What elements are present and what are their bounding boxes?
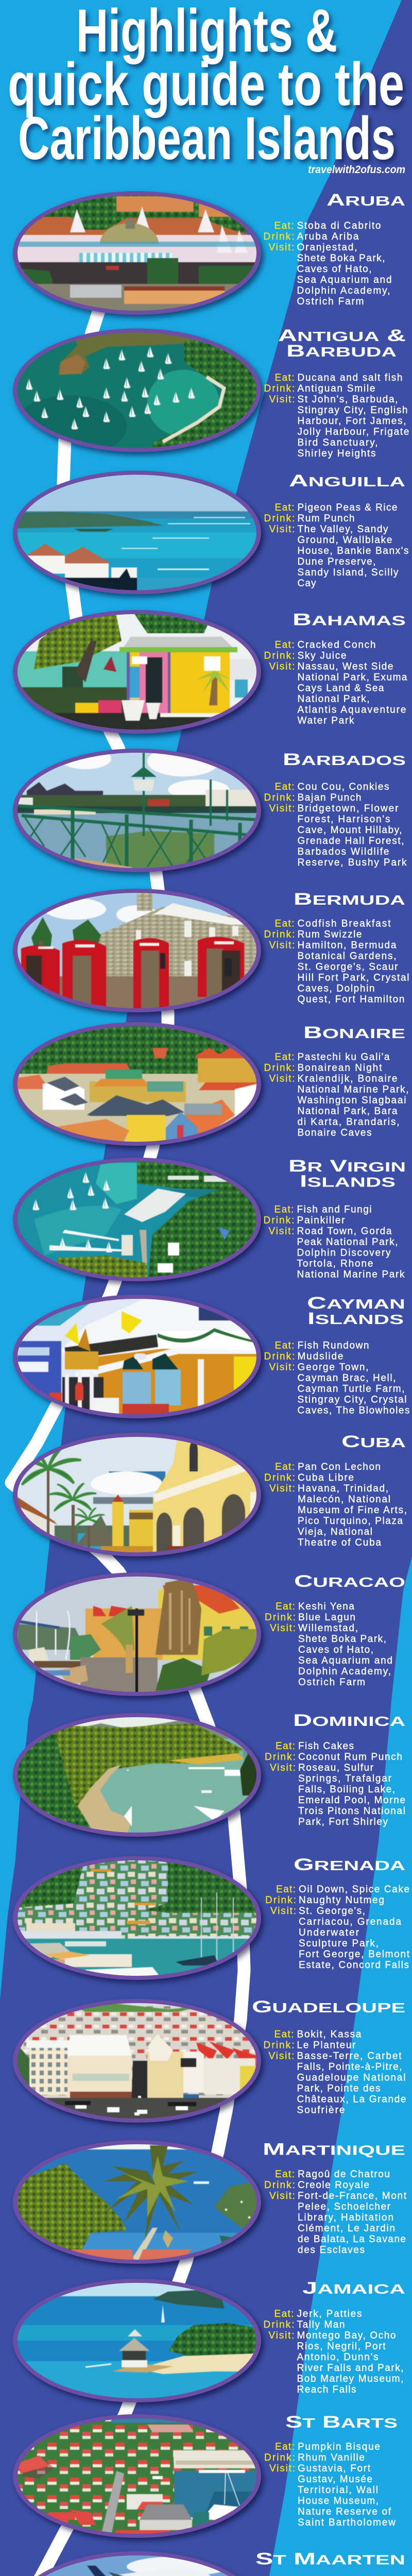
text block: Bermuda: Visit: (269, 940, 295, 951)
text block: Aruba: Oranjestad, (297, 242, 357, 253)
text block: Antigua & Barbuda: Stingray City, English (298, 405, 408, 416)
text block: Martinique: Drink: (264, 2180, 295, 2191)
text block: Cuba: Pan Con Lechon (298, 1462, 381, 1472)
text block: Aruba (264, 221, 391, 307)
photo: St Maarten plane over beach (13, 2551, 261, 2576)
text block: Antigua & Barbuda: Eat: (275, 372, 295, 383)
text block: Grenada: Drink: (265, 1895, 296, 1906)
photo: Dominica green bay (13, 1713, 261, 1837)
text block: Cayman Islands: Cayman Brac, Hell, (298, 1372, 396, 1384)
heading: British Virgin Islands: B R V IRGIN (288, 1157, 406, 1175)
text block: Guadeloupe: Guadeloupe National (297, 2072, 406, 2083)
text block: Dominica: Coconut Rum Punch (298, 1752, 402, 1762)
text block: Martinique: de Balata, La Savane (298, 2234, 406, 2245)
text block: Curacao: Caves of Hato, (298, 1645, 373, 1655)
text block: Barbados: Drink: (264, 792, 295, 803)
text block: Grenada: Naughty Nutmeg (299, 1895, 384, 1906)
text block: Bonaire: National Park, Bara (298, 1106, 398, 1117)
heading: St Maarten: S T M AARTEN (255, 2549, 405, 2568)
text block: Aruba: Ostrich Farm (297, 296, 364, 307)
heading: Cuba: C UBA (341, 1432, 406, 1451)
text block: Jamaica: Tally Man (297, 2319, 345, 2330)
text block: Guadeloupe: Bokit, Kassa (297, 2029, 362, 2040)
text block: Curacao: Blue Lagun (298, 1612, 355, 1623)
panel: Bermuda (13, 889, 409, 1012)
text block: Cayman Islands: George Town, (298, 1362, 369, 1372)
text block: Antigua & Barbuda: Ducana and salt fish (298, 372, 403, 383)
text block: Antigua & Barbuda: St John's, Barbuda, (298, 394, 398, 405)
text block: Dominica (265, 1741, 405, 1827)
text block: Bahamas: National Park, (298, 693, 370, 705)
text block: Jamaica: Eat: (274, 2309, 294, 2319)
text block: Anguilla: Eat: (275, 502, 295, 513)
photo: BVI marina from above (13, 1158, 261, 1281)
text block: Dominica: Falls, Boiling Lake, (298, 1784, 395, 1795)
heading: Bermuda: B ERMUDA (294, 890, 405, 908)
text block: Barbados: Reserve, Bushy Park (298, 857, 407, 868)
panel: Grenada (13, 1855, 410, 1980)
text block: Cayman Islands (264, 1341, 410, 1416)
text block: Dominica: Fish Cakes (298, 1741, 354, 1752)
text block: Jamaica: Antonio, Dunn's (297, 2352, 378, 2363)
panel: Curacao (13, 1572, 405, 1696)
heading: Cayman Islands: C AYMAN (307, 1294, 405, 1312)
text block: Grenada (265, 1884, 410, 1971)
text block: Barbados: Barbados Wildlife (298, 846, 389, 857)
text block: Jamaica: Bob Marley Museum, (297, 2374, 404, 2384)
text block: Curacao: Shete Boka Park, (298, 1634, 386, 1645)
panel: St Barts (13, 2413, 398, 2538)
text block: Guadeloupe: Eat: (274, 2029, 294, 2040)
text block: St Barts: Rhum Vanille (298, 2452, 365, 2463)
panel: Cuba (13, 1432, 407, 1556)
text block: Bonaire: Eat: (275, 1052, 295, 1062)
panel: Jamaica (13, 2279, 405, 2402)
text block: Jamaica: Jerk, Patties (297, 2309, 362, 2319)
text block: Anguilla: House, Bankie Banx's (298, 546, 409, 556)
heading: British Virgin Islands: ISLANDS (300, 1172, 396, 1190)
photo: Bonaire colourful rooftops (13, 1022, 261, 1146)
photo: Martinique palm over blue sea (13, 2140, 261, 2264)
text block: Anguilla: Ground, Wallblake (298, 535, 392, 546)
text block: Aruba: Sea Aquarium and (297, 275, 391, 285)
text block: Barbados: Forest, Harrison's (298, 814, 390, 825)
text block: Bermuda: Hill Fort Park, Crystal (298, 973, 409, 983)
text block: Cayman Islands: Drink: (264, 1351, 295, 1362)
photo: Aruba shopping mall (13, 191, 266, 315)
text block: Dominica: Eat: (276, 1741, 295, 1752)
panel: British Virgin Islands (13, 1157, 406, 1281)
text block: Bahamas: National Park, Exuma (298, 672, 407, 683)
text block: Anguilla: Rum Punch (298, 513, 354, 524)
heading: Dominica: D OMINICA (293, 1711, 405, 1730)
text block: Bahamas: Atlantis Aquaventure (298, 705, 406, 715)
photo: Jamaica turquoise sea and gazebo (13, 2279, 261, 2402)
text block: Cuba: Pico Turquino, Plaza (298, 1516, 403, 1527)
text block: Martinique: Library, Habitation (298, 2212, 393, 2223)
text block: Bermuda: Rum Swizzle (298, 929, 362, 940)
text block: Bahamas: Water Park (298, 715, 354, 726)
text block: Antigua & Barbuda: Jolly Harbour, Frigate (298, 427, 409, 437)
text block: Barbados: Cave, Mount Hillaby, (298, 825, 402, 836)
photo: Bermuda red telephone boxes (13, 889, 261, 1012)
text block: Anguilla (264, 502, 409, 589)
text block: Curacao: Visit: (270, 1623, 296, 1634)
text block: British Virgin Islands: Fish and Fungi (297, 1205, 372, 1215)
text block: Cuba: Drink: (264, 1472, 295, 1483)
heading: Curacao: C URACAO (294, 1572, 405, 1590)
text block: British Virgin Islands: Road Town, Gorda (297, 1226, 392, 1236)
heading: Anguilla: A NGUILLA (289, 471, 405, 490)
text block: Antigua & Barbuda: Shirley Heights (298, 448, 376, 459)
text block: Martinique: Ragoû de Chatrou (298, 2169, 390, 2180)
text block: Dominica: Drink: (265, 1752, 296, 1762)
text block: St Barts (264, 2442, 396, 2528)
text block: Dominica: Park, Fort Shirley (298, 1817, 388, 1827)
heading: Cayman Islands (307, 1294, 405, 1328)
text block: British Virgin Islands: Visit: (269, 1226, 295, 1236)
text block: Anguilla: Pigeon Peas & Rice (298, 502, 398, 513)
photo: Grenada harbour and hillside houses (13, 1856, 261, 1980)
text block: Martinique: Visit: (269, 2191, 295, 2201)
white route line connecting the islands (8, 299, 244, 2576)
text block: Grenada: Sculpture Park, (299, 1938, 379, 1949)
text block: Cuba: Malecón, National (298, 1494, 390, 1505)
text block: Martinique: Eat: (275, 2169, 295, 2180)
heading: St Barts: S T B ARTS (285, 2413, 398, 2431)
text block: Curacao: Dolphin Academy, (298, 1666, 391, 1677)
text block: Dominica: Visit: (270, 1762, 296, 1773)
text block: Cayman Islands: Fish Rundown (298, 1341, 369, 1351)
panel: Dominica (13, 1711, 405, 1837)
text block: British Virgin Islands: Dolphin Discovery (297, 1248, 391, 1258)
text block: Jamaica (264, 2309, 404, 2395)
text block: Bermuda (264, 918, 409, 1005)
text block: Martinique (264, 2169, 407, 2256)
text block: Bonaire: di Karta, Brandaris, (298, 1117, 400, 1127)
text block: Dominica: Springs, Trafalgar (298, 1773, 392, 1784)
photo: Barbados bridge and lamp post (13, 746, 261, 872)
text block: Bermuda: Quest, Fort Hamilton (298, 994, 405, 1005)
heading: Bonaire: B ONAIRE (303, 1023, 405, 1042)
text block: Guadeloupe: Visit: (269, 2050, 295, 2062)
text block: British Virgin Islands: Tortola, Rhone (297, 1258, 373, 1269)
text block: Cuba (264, 1462, 407, 1548)
text block: Bermuda: Botanical Gardens, (298, 951, 397, 961)
text block: Jamaica: River Falls and Park, (297, 2363, 404, 2374)
heading: Antigua & Barbuda (278, 326, 406, 360)
text block: Aruba: Aruba Ariba (297, 231, 359, 242)
text block: Guadeloupe: Soufrière (297, 2105, 345, 2115)
text block: Bermuda: Caves, Dolphin (298, 983, 375, 994)
text block: Guadeloupe (264, 2029, 406, 2115)
text block: Bonaire: Pastechi ku Gali'a (298, 1052, 390, 1062)
text block: Cuba: Cuba Libre (298, 1472, 354, 1483)
text block: Bahamas: Cracked Conch (298, 640, 376, 650)
photo: Anguilla sea view with villas (13, 471, 261, 595)
text block: Barbados (264, 782, 407, 868)
text block: Barbados: Eat: (275, 782, 295, 792)
text block: Barbados: Bajan Punch (298, 792, 362, 803)
text block: Curacao: Ostrich Farm (298, 1677, 365, 1688)
text block: British Virgin Islands (264, 1205, 405, 1280)
text block: Anguilla: Visit: (269, 524, 295, 535)
text block: Antigua & Barbuda (264, 372, 409, 459)
text block: Curacao: Keshi Yena (298, 1601, 354, 1612)
text block: British Virgin Islands: Peak National Park, (297, 1236, 398, 1248)
text block: Grenada: Estate, Concord Falls (299, 1960, 409, 1971)
text block: Barbados: Visit: (269, 803, 295, 814)
text block: St Barts: Eat: (275, 2442, 295, 2452)
text block: Bahamas (264, 640, 407, 726)
text block: Guadeloupe: Le Planteur (297, 2040, 356, 2050)
text block: Curacao: Drink: (265, 1612, 296, 1623)
text block: Barbados: Cou Cou, Conkies (298, 782, 389, 792)
heading: Martinique: M ARTINIQUE (263, 2140, 405, 2159)
text block: Cayman Islands: Mudslide (298, 1351, 343, 1362)
text block: Bahamas: Eat: (275, 640, 295, 650)
title (8, 0, 404, 173)
website credit top: travelwith2ofus.com (308, 164, 405, 176)
text block: Cuba: Theatre of Cuba (298, 1537, 381, 1548)
panel: Barbados (13, 746, 407, 872)
text block: Jamaica: Rios, Negril, Port (297, 2341, 386, 2352)
text block: Jamaica: Drink: (264, 2319, 295, 2330)
text block: Bonaire: Washington Slagbaai (298, 1095, 406, 1106)
panel: Bahamas (13, 610, 407, 734)
heading: Antigua & Barbuda: B ARBUDA (286, 342, 397, 360)
text block: Anguilla: Sandy Island, Scilly (298, 567, 399, 578)
text block: Bahamas: Visit: (269, 662, 295, 672)
text block: St Barts: Saint Bartholomew (298, 2517, 396, 2528)
panel: Guadeloupe (13, 1997, 406, 2123)
text block: Cuba: Museum of Fine Arts, (298, 1505, 407, 1516)
text block: Aruba: Stoba di Cabrito (297, 221, 381, 231)
heading: Aruba: A RUBA (327, 191, 405, 209)
text block: Aruba: Visit: (269, 242, 295, 253)
text block: Bonaire: National Marine Park, (298, 1084, 409, 1095)
text block: Martinique: Clément, Le Jardin (298, 2223, 395, 2234)
text block: Martinique: Creole Royale (298, 2180, 369, 2191)
text block: British Virgin Islands: Drink: (264, 1215, 295, 1226)
heading: Grenada: G RENADA (294, 1855, 405, 1874)
panel: Bonaire (13, 1022, 409, 1146)
text block: Grenada: Underwater (299, 1927, 359, 1938)
text block: Bermuda: St. George's, Scaur (298, 961, 398, 973)
heading: Jamaica: J AMAICA (302, 2279, 405, 2297)
text block: Anguilla: Drink: (264, 513, 295, 524)
panel: Martinique (13, 2140, 407, 2264)
panel: Anguilla (13, 471, 409, 595)
text block: Dominica: Roseau, Sulfur (298, 1762, 374, 1773)
heading: Barbados: B ARBADOS (283, 750, 406, 769)
heading: Cayman Islands: ISLANDS (307, 1309, 404, 1328)
text block: Cuba: Havana, Trinidad, (298, 1483, 388, 1494)
text block: Cayman Islands: Stingray City, Crystal (298, 1394, 407, 1405)
text block: Aruba: Dolphin Academy, (297, 285, 390, 296)
text block: Bonaire: Drink: (264, 1062, 295, 1074)
text block: Antigua & Barbuda: Visit: (269, 394, 295, 405)
text block: Bermuda: Codfish Breakfast (298, 918, 391, 929)
heading: Antigua & Barbuda: A NTIGUA & (278, 326, 406, 345)
text block: Grenada: Eat: (276, 1884, 296, 1895)
photo: Cayman shops with balcony (13, 1295, 261, 1418)
text block: Dominica: Emerald Pool, Morne (298, 1795, 405, 1806)
text block: Curacao: Willemstad, (298, 1623, 358, 1634)
text block: St Barts: Territorial, Wall (298, 2485, 378, 2496)
text block: Jamaica: Montego Bay, Ocho (297, 2330, 396, 2341)
text block: Aruba: Eat: (274, 221, 294, 231)
text block: Jamaica: Reach Falls (297, 2384, 356, 2395)
text block: St Barts: Gustavia, Fort (298, 2463, 371, 2474)
text block: Bahamas: Cays Land & Sea (298, 683, 384, 693)
text block: Grenada: Oil Down, Spice Cake (299, 1884, 409, 1895)
text block: St Barts: House Museum, (298, 2496, 379, 2506)
text block: Cayman Islands: Eat: (275, 1341, 295, 1351)
photo: Curacao Willemstad waterfront (13, 1572, 261, 1696)
text block: Bonaire: Bonairean Night (298, 1062, 382, 1074)
text block: Guadeloupe: Basse-Terre, Carbet (297, 2050, 402, 2062)
text block: St Barts: Pumpkin Bisque (298, 2442, 380, 2452)
text block: Aruba: Caves of Hato, (297, 264, 372, 275)
text block: Antigua & Barbuda: Antiguan Smile (298, 383, 375, 394)
text block: Grenada: St. George's, (299, 1906, 365, 1917)
text block: St Barts: Gustav, Musée (298, 2474, 372, 2485)
text block: Guadeloupe: Falls, Pointe-à-Pitre, (297, 2062, 402, 2072)
panel: Aruba (13, 191, 405, 315)
panel: Antigua & Barbuda (13, 326, 409, 459)
photo: Bahamas colourful hut (13, 610, 261, 734)
panel: St Maarten (13, 2549, 406, 2576)
text block: Antigua & Barbuda: Drink: (264, 383, 295, 394)
text block: British Virgin Islands: National Marine Park (297, 1269, 405, 1280)
text block: Barbados: Grenade Hall Forest, (298, 836, 404, 846)
text block: Aruba: Drink: (264, 231, 295, 242)
text block: Anguilla: The Valley, Sandy (298, 524, 388, 535)
text block: Jamaica: Visit: (269, 2330, 295, 2341)
text block: Grenada: Fort George, Belmont (299, 1949, 410, 1960)
panel: Cayman Islands (13, 1294, 410, 1418)
text block: Guadeloupe: Park, Pointe des (297, 2083, 380, 2094)
photo: Cuba yellow church and palms (13, 1433, 261, 1556)
text block: British Virgin Islands: Eat: (274, 1205, 294, 1215)
text block: Cayman Islands: Visit: (269, 1362, 295, 1372)
heading: Guadeloupe: G UADELOUPE (252, 1997, 405, 2016)
text block: Cuba: Visit: (269, 1483, 295, 1494)
text block: Bahamas: Nassau, West Side (298, 662, 393, 672)
text block: Aruba: Shete Boka Park, (297, 253, 385, 264)
text block: Grenada: Visit: (270, 1906, 296, 1917)
text block: Anguilla: Dune Preserve, (298, 556, 376, 567)
text block: Guadeloupe: Châteaux, La Grande (297, 2094, 406, 2105)
text block: Martinique: Fort-de-France, Mont (298, 2191, 407, 2201)
text block: British Virgin Islands: Painkiller (297, 1215, 345, 1226)
text block: Bonaire (264, 1052, 409, 1139)
text block: Curacao (265, 1601, 392, 1688)
photo: Guadeloupe city street (13, 1999, 261, 2123)
text block: Curacao: Eat: (276, 1601, 295, 1612)
text block: St Barts: Visit: (269, 2463, 295, 2474)
text block: Antigua & Barbuda: Harbour, Fort James, (298, 416, 406, 427)
text block: Barbados: Bridgetown, Flower (298, 803, 399, 814)
photo: St Barts Gustavia harbour (13, 2414, 262, 2538)
text block: Guadeloupe: Drink: (264, 2040, 295, 2050)
text block: Curacao: Sea Aquarium and (298, 1655, 392, 1666)
text block: Antigua & Barbuda: Bird Sanctuary, (298, 437, 378, 448)
heading: British Virgin Islands (288, 1157, 406, 1190)
text block: Bonaire: Visit: (269, 1074, 295, 1084)
text block: Cuba: Eat: (275, 1462, 295, 1472)
text block: Cayman Islands: Cayman Turtle Farm, (298, 1384, 405, 1394)
text block: Anguilla: Cay (298, 578, 316, 589)
text block: Grenada: Carriacou, Grenada (299, 1917, 401, 1927)
heading: Bahamas: B AHAMAS (293, 610, 406, 629)
text block: Bahamas: Drink: (264, 650, 295, 662)
text block: St Barts: Nature Reserve of (298, 2506, 391, 2517)
text block: Bahamas: Sky Juice (298, 650, 346, 662)
text block: Martinique: Pelee, Schoelcher (298, 2201, 391, 2212)
text block: Bermuda: Drink: (264, 929, 295, 940)
text block: Bermuda: Eat: (275, 918, 295, 929)
text block: Cayman Islands: Caves, The Blowholes (298, 1405, 410, 1416)
text block: Bonaire: Kralendijk, Bonaire (298, 1074, 398, 1084)
text block: Martinique: des Esclaves (298, 2245, 365, 2256)
text block: Bonaire: Bonaire Caves (298, 1127, 372, 1139)
photo: Antigua bay with sailboats (13, 329, 261, 457)
text block: Dominica: Trois Pitons National (298, 1806, 405, 1817)
text block: Cuba: Vieja, National (298, 1527, 372, 1537)
text block: Bermuda: Hamilton, Bermuda (298, 940, 397, 951)
text block: St Barts: Drink: (264, 2452, 295, 2463)
